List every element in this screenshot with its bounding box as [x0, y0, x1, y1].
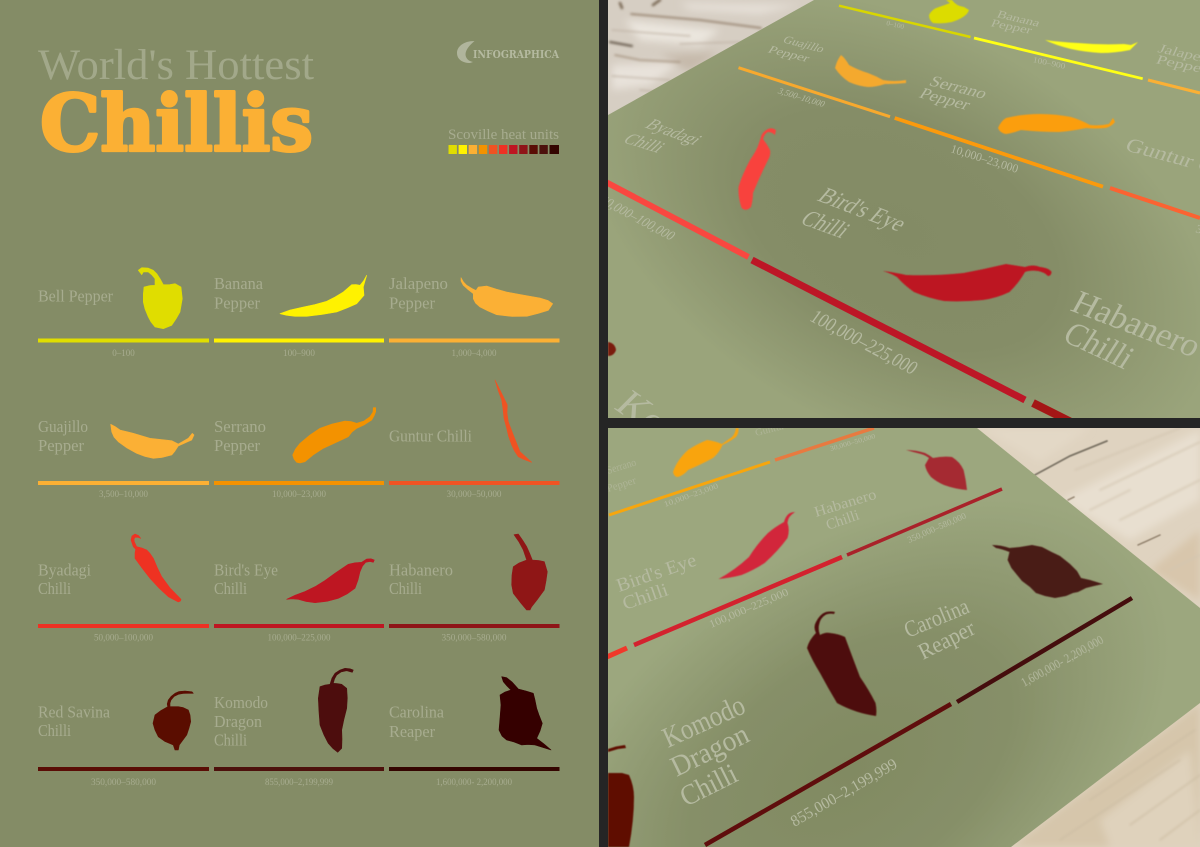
item: Komodo Dragon Chilli — [214, 668, 384, 788]
logo: Infographica: INFOGRAPHICA — [473, 48, 559, 61]
item: Guajillo Pepper: 3,500–10,000 — [99, 490, 148, 500]
item: Bird's Eye Chilli: Chilli — [214, 579, 247, 598]
labels: Pepper — [765, 44, 812, 65]
item: Jalapeno Pepper: Jalapeno — [389, 274, 448, 293]
item: Carolina Reaper: 1,600,000- 2,200,000 — [436, 778, 512, 788]
range: 350,000-580,000: 350,000–580,000 — [906, 510, 968, 545]
item: Jalapeno Pepper: 1,000–4,000 — [452, 349, 497, 359]
pepper: bell — [929, 0, 969, 23]
item: Byadagi Chilli: 50,000–100,000 — [94, 634, 153, 644]
item: Guajillo Pepper: Guajillo — [38, 417, 88, 436]
item: Red Savina Chilli: Red Savina — [38, 702, 110, 722]
pepper: carolina reaper — [992, 545, 1103, 598]
panel: perspective photo top — [608, 0, 1200, 418]
range: 100,000-225,000: 100,000–225,000 — [707, 586, 791, 631]
labels: Chilli — [1057, 316, 1140, 376]
item: Red Savina Chilli: Chilli — [38, 721, 71, 740]
label: Banana Pepper: Banana — [995, 9, 1042, 29]
bars — [600, 6, 1200, 424]
pepper: komodo — [807, 612, 876, 716]
item: Guajillo Pepper: Pepper — [38, 436, 84, 455]
item: Bird's Eye Chilli — [214, 559, 384, 644]
item: Serrano Pepper: 10,000–23,000 — [272, 490, 326, 500]
label: Serrano Pepper fragment: Serrano — [605, 456, 638, 477]
label: Carolina Reaper: Carolina — [900, 593, 973, 643]
peppers — [608, 0, 1138, 356]
peppers — [608, 428, 1103, 847]
item: Banana Pepper: Pepper — [214, 294, 260, 312]
logo: Infographica — [457, 41, 559, 63]
item: Byadagi Chilli: Chilli — [38, 579, 71, 598]
item: Red Savina Chilli: 350,000–580,000 — [91, 778, 156, 788]
labels — [608, 10, 1200, 418]
poster surface — [608, 0, 1200, 418]
label: Bird's Eye Chilli: Bird's Eye — [614, 550, 699, 597]
item: Byadagi Chilli — [38, 534, 209, 644]
labels: Pepper — [989, 18, 1034, 37]
title: World's Hottest: World's Hottest — [38, 42, 314, 89]
item: Bell Pepper — [38, 268, 209, 359]
wood surface — [608, 0, 814, 115]
item: Habanero Chilli: 350,000–580,000 — [442, 634, 507, 644]
pepper: bird's eye — [719, 512, 795, 579]
label: Byadagi Chilli: Byadagi — [641, 116, 707, 148]
range: 30,000-50,000: 30,000–50,000 — [829, 432, 877, 453]
pepper: bird's eye — [883, 264, 1052, 301]
panel: perspective photo bottom — [600, 421, 1200, 847]
range: 50,000-100,000: 50,000–100,000 — [595, 193, 679, 243]
labels: Pepper — [916, 84, 975, 114]
labels: Chilli — [619, 130, 670, 156]
item: Byadagi Chilli: Byadagi — [38, 560, 91, 580]
labels: Chilli — [795, 206, 855, 243]
item: Habanero Chilli — [389, 534, 560, 644]
item: Guntur Chilli: 30,000–50,000 — [446, 490, 502, 500]
pepper: byadagi — [738, 128, 776, 210]
labels: Chilli — [620, 580, 671, 615]
labels: Pepper — [605, 475, 638, 495]
pepper: habanero — [906, 450, 967, 490]
pepper: savina fragment — [608, 342, 616, 356]
item: Carolina Reaper: Carolina — [389, 702, 444, 722]
item: Bird's Eye Chilli: Bird's Eye — [214, 560, 278, 580]
item: Banana Pepper: Banana — [214, 274, 263, 293]
item: Serrano Pepper: Pepper — [214, 436, 260, 455]
label: Komodo Dragon Chilli: Komodo — [658, 689, 750, 754]
item: Serrano Pepper — [214, 408, 384, 500]
range: 10,000-23,000: 10,000–23,000 — [949, 142, 1020, 176]
item: Guntur Chilli — [389, 380, 560, 500]
item: Bird's Eye Chilli: 100,000–225,000 — [268, 634, 331, 644]
pepper: serrano — [998, 114, 1115, 134]
panel: flat poster — [0, 0, 599, 847]
label: Serrano Pepper: Serrano — [926, 72, 991, 102]
range: 100,000-225,000: 100,000–225,000 — [806, 306, 922, 379]
labels: Reaper — [914, 615, 979, 664]
range: 1,600,000-2,200,000: 1,600,000- 2,200,000 — [1018, 632, 1106, 690]
label: Guajillo Pepper: Guajillo — [780, 34, 827, 55]
pepper: serrano — [673, 428, 739, 477]
labels: Chilli — [824, 508, 861, 534]
item: Habanero Chilli: Habanero — [389, 560, 453, 580]
pepper: banana — [1045, 40, 1138, 53]
item: Jalapeno Pepper: Pepper — [389, 294, 435, 312]
legend: Scoville heat units: Scoville heat units — [448, 127, 559, 143]
item: Carolina Reaper: Reaper — [389, 722, 435, 741]
item: Banana Pepper: 100–900 — [283, 349, 315, 359]
item: Jalapeno Pepper — [389, 274, 560, 359]
item: Guntur Chilli: Guntur Chilli — [389, 426, 472, 446]
range: 855,000-2,199,999: 855,000–2,199,999 — [788, 756, 900, 830]
range: 0-100: 0–100 — [886, 19, 905, 31]
pepper: guajillo — [835, 55, 906, 87]
item: Carolina Reaper — [389, 677, 560, 788]
wood surface — [960, 428, 1200, 847]
item: Komodo Dragon Chilli: Dragon — [214, 712, 262, 731]
range: 100-900: 100–900 — [1032, 55, 1066, 71]
item: Red Savina Chilli — [38, 691, 209, 788]
item: Bell Pepper: Bell Pepper — [38, 286, 113, 306]
poster surface — [608, 428, 1200, 847]
item: Serrano Pepper: Serrano — [214, 417, 266, 436]
label: Komodo fragment: Komodo — [607, 382, 753, 495]
bars — [600, 428, 1132, 845]
title: Chillis: Chillis — [40, 78, 313, 170]
labels: Pepper — [1154, 52, 1200, 77]
legend: Scoville heat units — [448, 127, 559, 154]
item: Komodo Dragon Chilli: 855,000–2,199,999 — [265, 778, 333, 788]
item: Komodo Dragon Chilli: Komodo — [214, 693, 268, 712]
item: Banana Pepper — [214, 274, 384, 359]
labels: Chilli — [675, 758, 743, 813]
label: Guntur fragment: Guntur — [754, 421, 787, 439]
label: Bird's Eye Chilli: Bird's Eye — [812, 184, 912, 236]
pepper: red savina — [608, 745, 634, 847]
labels: Dragon — [666, 718, 755, 783]
item: Habanero Chilli: Chilli — [389, 579, 422, 598]
label: Habanero Chilli: Habanero — [812, 487, 878, 521]
range: 3,500-10,000: 3,500–10,000 — [776, 86, 828, 109]
range: 10,000-23,000: 10,000–23,000 — [663, 481, 719, 509]
labels — [605, 421, 1106, 830]
item: Guajillo Pepper — [38, 417, 209, 500]
item: Komodo Dragon Chilli: Chilli — [214, 730, 247, 750]
item: Bell Pepper: 0–100 — [112, 349, 135, 359]
